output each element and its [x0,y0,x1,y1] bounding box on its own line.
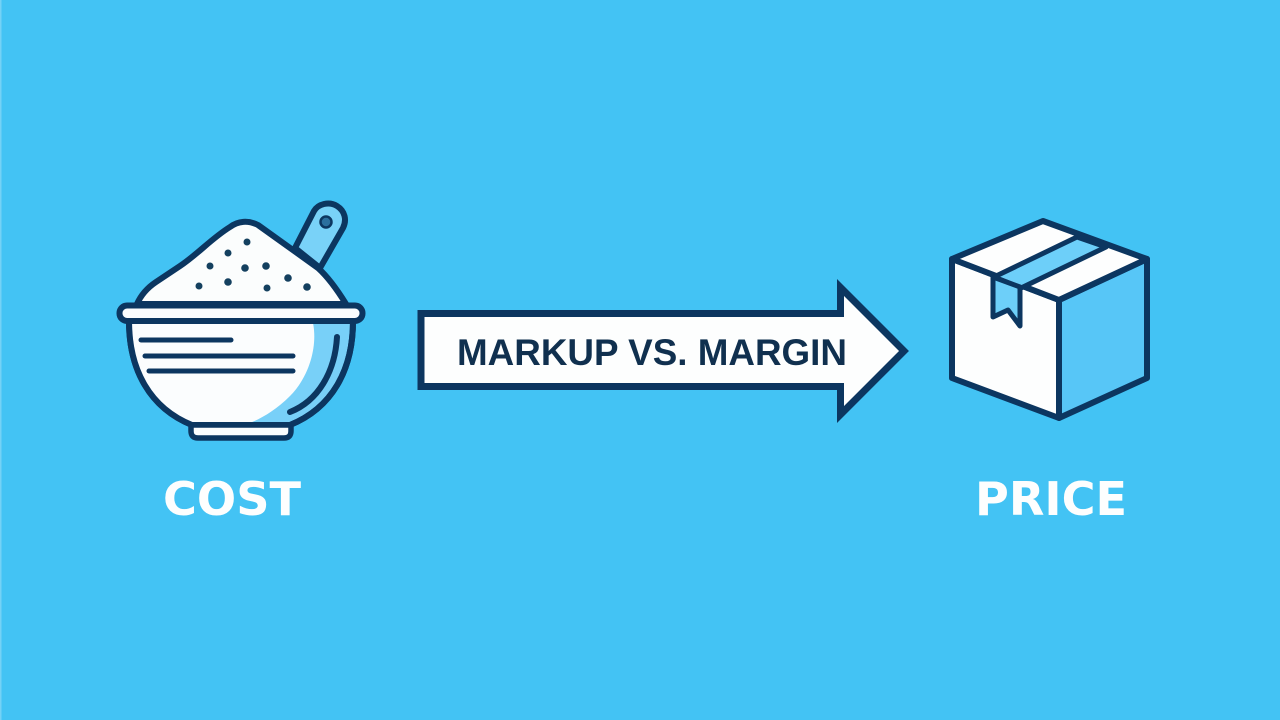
box tape [993,237,1106,326]
label: price: PRICE [975,472,1127,526]
arrow label: MARKUP VS. MARGIN [457,332,847,373]
icon: bowl of flour (cost) [120,204,362,438]
icon: cardboard box (price) [952,221,1147,418]
flour mound [137,222,346,304]
bowl rim [120,306,362,321]
box top face [952,221,1147,300]
arrow: markup vs. margin [421,288,904,414]
scoop handle [295,204,345,268]
bowl foot [191,425,291,438]
box right face [1059,259,1147,418]
bowl text lines and highlight [141,337,337,412]
bowl body [129,321,353,425]
box left face [952,259,1059,418]
label: cost: COST [163,472,302,526]
